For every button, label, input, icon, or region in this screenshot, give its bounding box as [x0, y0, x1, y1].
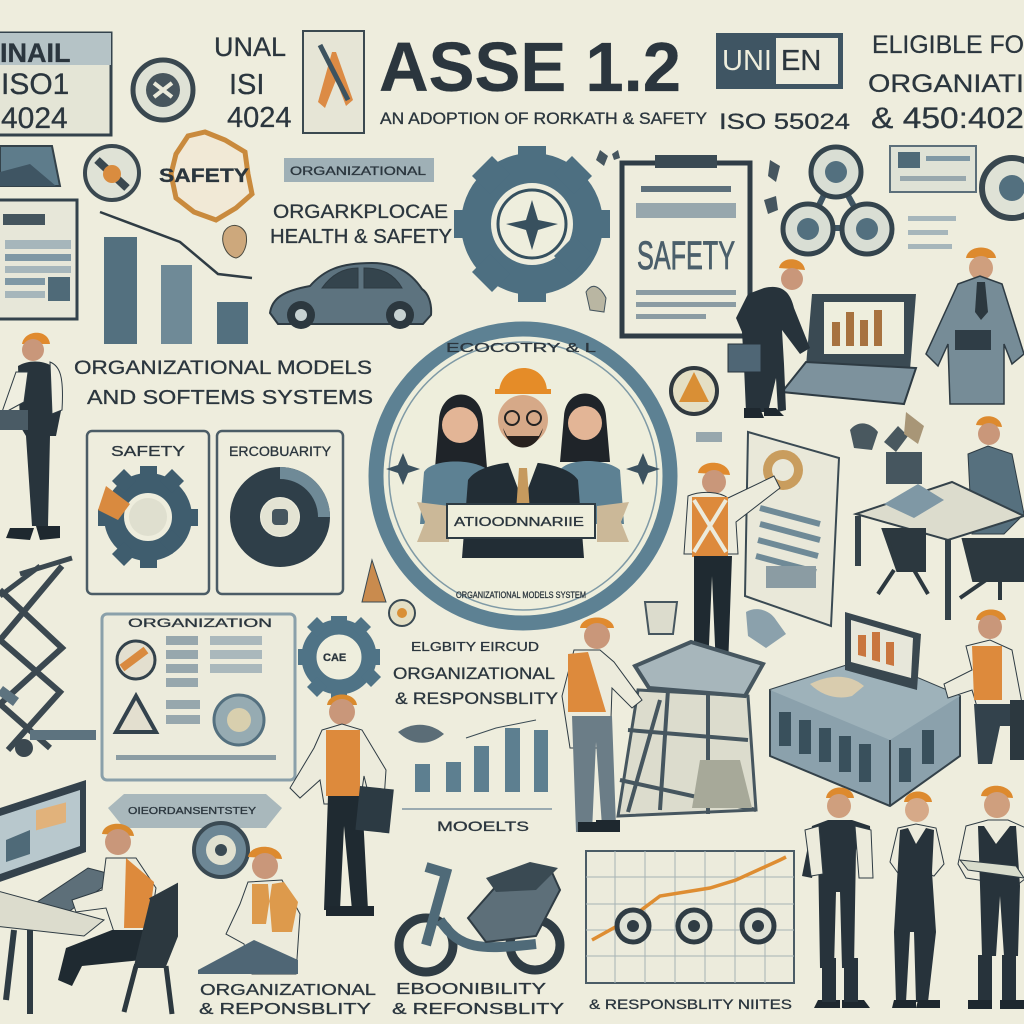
footer text: organizational responsibility: ORGANIZATIONAL [200, 982, 376, 999]
heading: workplace health and safety: ORGANIZATIONAL [290, 166, 427, 178]
bar chart middle: MOOELTS [437, 818, 529, 834]
small scattered icons [398, 150, 786, 806]
bar chart top left [100, 212, 252, 344]
panel: isometric building with monitor [770, 612, 960, 806]
bar chart middle [402, 720, 552, 834]
central circle emblem [376, 329, 670, 623]
title: ASSE 1.2 [379, 28, 681, 106]
heading: organizational models: AND SOFTEMS SYSTEMS [87, 387, 373, 409]
text block: eligibility and responsibility: & RESPONSBLITY [395, 690, 558, 708]
header badge: INAIL ISO1 4024 [0, 33, 111, 135]
footer text: organizational responsibility [199, 982, 376, 1018]
header text: eligible for organisation: & 450:402 [871, 102, 1024, 135]
header text: eligible for organisation: ELIGIBLE FO [872, 31, 1024, 59]
footer text: organizational responsibility: & REPONSBLITY [199, 1001, 371, 1018]
woman left [435, 394, 487, 468]
icon: gear with label [298, 616, 381, 698]
footer text: economicity and responsibility: EBOONIBILITY [396, 981, 546, 998]
icon: safety ribbon card [303, 31, 364, 133]
icon: scooter [399, 862, 560, 972]
icon: folder top-left [0, 146, 60, 186]
header text: eligible for organisation [868, 31, 1024, 135]
header badge: UNI EN ISO 55024: UNI [722, 45, 772, 77]
heading: workplace health and safety: ORGARKPLOCAE [273, 202, 448, 223]
title: AN ADOPTION OF RORKATH & SAFETY [380, 110, 707, 128]
icon: banner label: OIEORDANSENTSTEY [128, 806, 256, 817]
emblem ribbon [417, 502, 449, 542]
icon: large gear [454, 146, 610, 302]
footer text: economicity and responsibility [392, 981, 564, 1018]
header badge: INAIL ISO1 4024: 4024 [1, 102, 68, 135]
panel: safety clipboard: SAFETY [637, 234, 735, 278]
icon: round seal bottom [194, 823, 248, 877]
panel: organisation chart card: ORGANIZATION [128, 616, 272, 630]
icon: car [270, 263, 431, 329]
person: manager bending at laptop [728, 259, 810, 418]
person: suited worker top right [926, 248, 1024, 404]
panel: safety clipboard [622, 155, 750, 336]
icon: banner label [108, 794, 282, 828]
safety badge: SAFETY [159, 166, 249, 187]
heading: organizational models [74, 357, 373, 409]
heading: workplace health and safety: HEALTH & SAFETY [270, 226, 452, 248]
icon: scissor lift left [0, 558, 96, 754]
panel: donut card: ERCOBUARITY [229, 444, 331, 459]
person: worker left with laptop [0, 333, 62, 540]
header badge: INAIL ISO1 4024: ISO1 [1, 68, 69, 101]
icon: open laptop [782, 294, 916, 404]
panel: safety gear card: SAFETY [111, 443, 185, 460]
central circle emblem: ORGANIZATIONAL MODELS SYSTEM [456, 590, 586, 600]
footer text: economicity and responsibility: & REFONSBLITY [392, 1001, 564, 1018]
person: seated worker bottom [198, 847, 300, 974]
man in suit [462, 462, 584, 558]
panel: organisation chart card [102, 614, 295, 780]
header badge: INAIL ISO1 4024: INAIL [0, 38, 70, 68]
panel: monitor card top right [890, 146, 1024, 249]
icon: cone circle [671, 368, 717, 414]
person: worker at board on platform [684, 463, 780, 673]
icon scatter: small tools [696, 412, 924, 452]
person: worker with orange vest and folder [290, 694, 394, 916]
person: worker at scaffold [562, 618, 642, 832]
panel: wall chart [745, 432, 839, 626]
scaffold platform [618, 642, 763, 816]
panel: line chart with gauges [586, 851, 794, 983]
header badge: UNI EN ISO 55024 [716, 33, 850, 134]
woman right [560, 394, 610, 462]
heading: organizational models: ORGANIZATIONAL MODELS [74, 357, 372, 379]
header text: UNAL ISI 4024 [214, 32, 292, 134]
footer text: responsibility notes: & RESPONSBLITY NIITES [589, 996, 792, 1012]
header badge: UNI EN ISO 55024: EN [781, 45, 821, 77]
emblem caption top: ECOCOTRY & L [446, 340, 596, 355]
person: worker woman 2 [890, 792, 944, 1008]
person: worker overalls 1 [802, 788, 873, 1008]
central circle emblem: ATIOODNNARIIE [454, 515, 584, 529]
panel: donut card [217, 431, 343, 594]
person: worker at computer bottom left [0, 780, 176, 1014]
icon: round seal [133, 60, 193, 120]
person: seated worker right [944, 610, 1024, 764]
heading: workplace health and safety [270, 158, 452, 248]
icon: cone small cluster [362, 560, 415, 626]
header text: eligible for organisation: ORGANIATI [868, 70, 1024, 98]
icon: gear with label: CAE [323, 652, 346, 664]
text block: eligibility and responsibility [393, 639, 558, 708]
person: worker overalls 3 [958, 786, 1024, 1009]
icon: hammer circle [85, 146, 139, 200]
person and desk right [856, 416, 1024, 620]
panel: safety gear card [87, 431, 209, 594]
header text: UNAL ISI 4024: ISI [229, 69, 264, 101]
safety badge [159, 132, 252, 220]
panel: dashboard card left [0, 200, 77, 319]
text block: eligibility and responsibility: ORGANIZATIONAL [393, 665, 555, 683]
header badge: UNI EN ISO 55024: ISO 55024 [719, 109, 850, 134]
text block: eligibility and responsibility: ELGBITY EIRCUD [411, 639, 539, 654]
panel: gear and dial icons top right [783, 147, 892, 254]
header text: UNAL ISI 4024: 4024 [227, 102, 292, 134]
header text: UNAL ISI 4024: UNAL [214, 32, 286, 62]
